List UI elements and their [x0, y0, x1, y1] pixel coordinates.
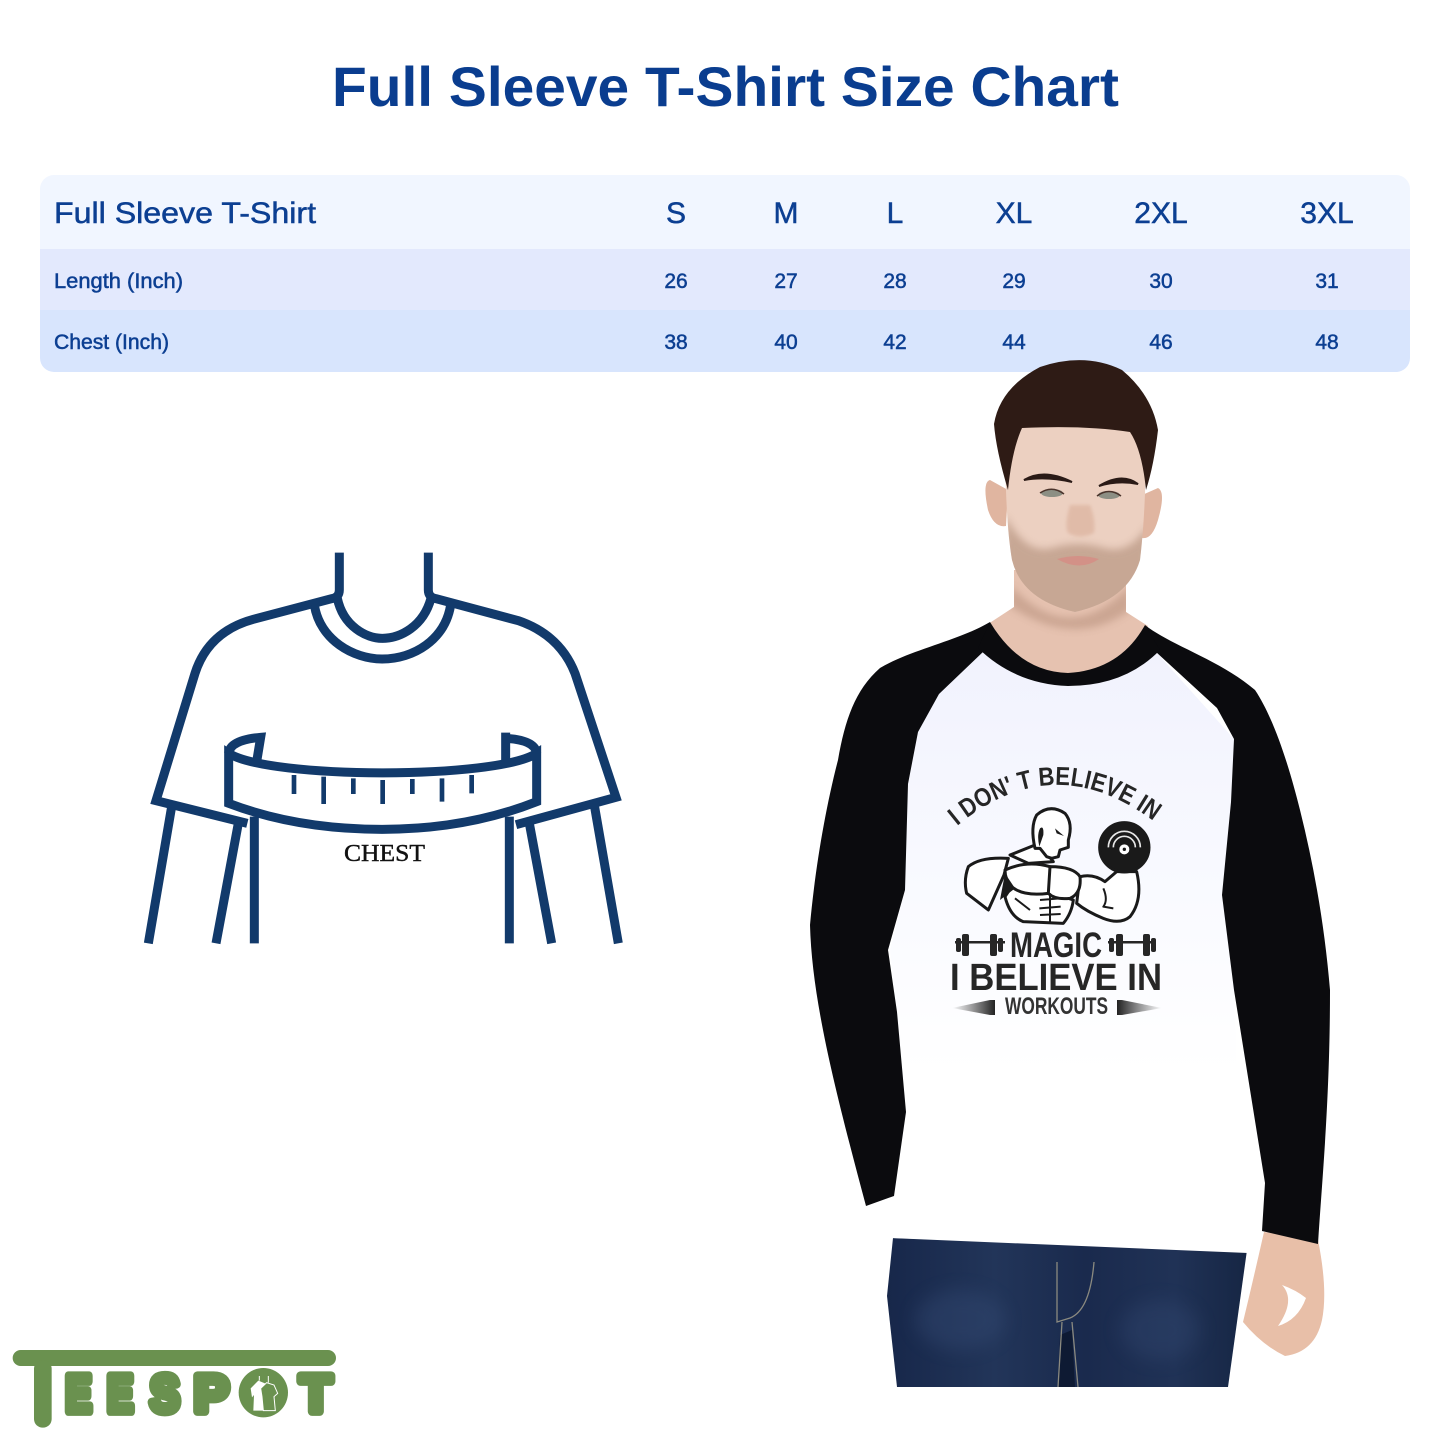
- logo letters: E: [65, 1366, 92, 1424]
- bodybuilder illustration: [965, 809, 1149, 923]
- table row: chest: [54, 331, 1339, 354]
- table row: length: 30: [1149, 270, 1173, 293]
- logo O with shirts icon: [239, 1368, 288, 1417]
- speed arrows: [952, 1000, 1162, 1015]
- hand: [1243, 1232, 1324, 1356]
- nose: [1066, 505, 1094, 536]
- table row: length: 29: [1002, 270, 1026, 293]
- print text: workouts: WORKOUTS: [1005, 993, 1108, 1020]
- table row: chest: Chest (Inch): [54, 331, 169, 354]
- jeans: [887, 1238, 1247, 1387]
- table row: chest: 38: [664, 331, 688, 354]
- logo letters: [65, 1366, 332, 1424]
- table row: length: 28: [883, 270, 907, 293]
- table row: length: [54, 270, 1339, 293]
- left black sleeve: [810, 622, 990, 1206]
- print arc text: [957, 785, 1160, 826]
- title: Full Sleeve T-Shirt Size Chart: [332, 55, 1119, 118]
- table header row: M: [774, 197, 798, 230]
- label: chest: CHEST: [344, 841, 425, 867]
- logo letters: S: [150, 1366, 180, 1424]
- table header row: [54, 197, 1354, 230]
- table row: chest: 44: [1002, 331, 1026, 354]
- logo bar and T stem: [13, 1350, 336, 1428]
- neck and head: [985, 360, 1162, 676]
- table row: chest: 46: [1149, 331, 1173, 354]
- table row: chest: 48: [1315, 331, 1339, 354]
- table header row: 2XL: [1134, 197, 1188, 230]
- print text: i believe in: I BELIEVE IN: [950, 957, 1162, 999]
- stubble: [1008, 518, 1143, 612]
- right black sleeve: [1145, 625, 1330, 1244]
- t-shirt white body: [890, 651, 1248, 1253]
- eyes: [1041, 489, 1063, 497]
- barbell right: [1108, 934, 1156, 956]
- table row: chest: 42: [883, 331, 907, 354]
- table row: chest: 40: [774, 331, 798, 354]
- shirt print: [947, 767, 1162, 1020]
- black collar: [978, 622, 1160, 686]
- size table: [40, 175, 1410, 372]
- chest measurement diagram: [148, 553, 618, 943]
- table header row: XL: [996, 197, 1032, 230]
- eyebrows: [1024, 474, 1138, 486]
- barbell left: [955, 934, 1005, 956]
- logo letters: E: [107, 1366, 133, 1424]
- teespot logo: [13, 1350, 336, 1428]
- hair: [994, 360, 1158, 490]
- print text: magic: MAGIC: [1010, 926, 1102, 965]
- logo letters: P: [194, 1366, 229, 1424]
- table header row: 3XL: [1300, 197, 1354, 230]
- table header row: Full Sleeve T-Shirt: [54, 197, 317, 230]
- table row: length: 26: [664, 270, 688, 293]
- shirt print: I DON' T BELIEVE IN: [947, 767, 1162, 826]
- table row: length: 27: [774, 270, 798, 293]
- logo letters: T: [300, 1366, 332, 1424]
- table header row: S: [666, 197, 686, 230]
- table row: length: 31: [1315, 270, 1339, 293]
- model wearing raglan t-shirt: [810, 360, 1330, 1387]
- table header row: L: [887, 197, 903, 230]
- table row: length: Length (Inch): [54, 270, 183, 293]
- lips: [1057, 556, 1099, 566]
